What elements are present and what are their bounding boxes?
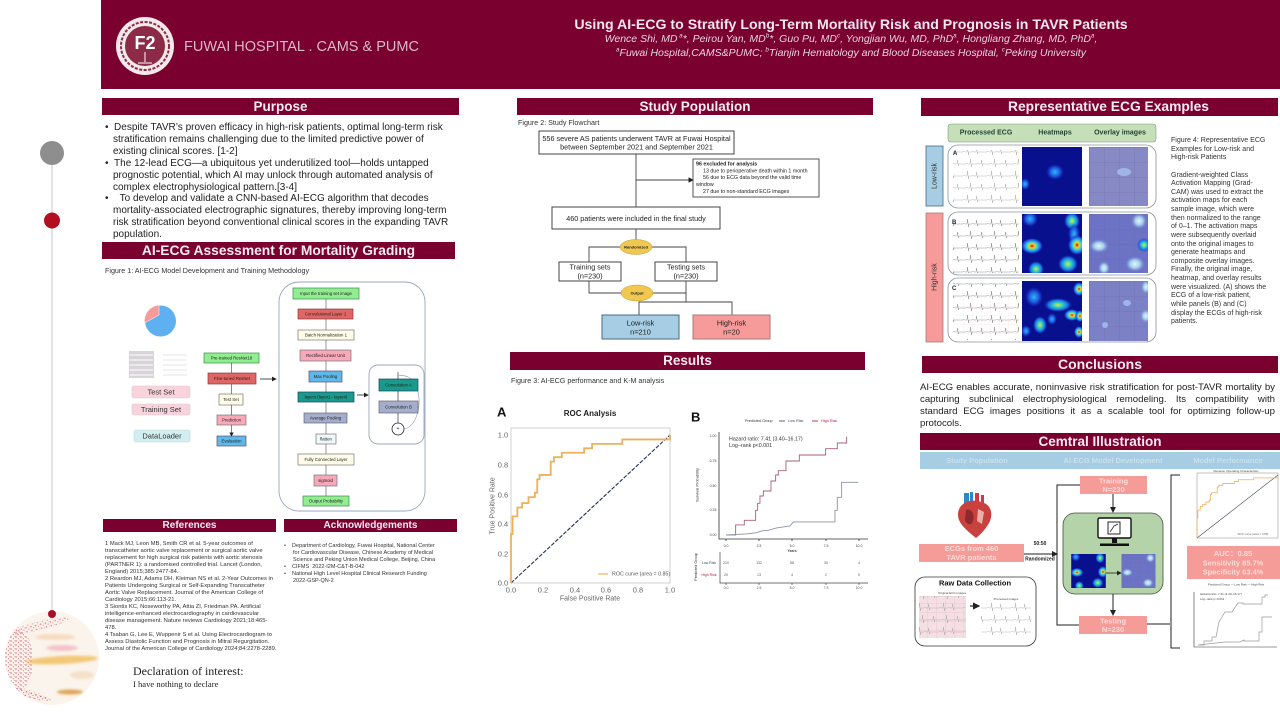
- dataset labels: Training Set: [141, 405, 182, 414]
- figure 4 caption and methods text: then normalized to the range: [1171, 215, 1261, 222]
- figure 4 caption and methods text: Examples for Low-risk and: [1171, 146, 1254, 153]
- heading: Acknowledgements: Acknowledgements: [324, 520, 417, 531]
- figure 3 caption: Figure 3: AI-ECG performance and K-M analysis: [511, 377, 664, 385]
- figure 4 caption and methods text: Finally, the original image,: [1171, 266, 1252, 273]
- low-risk side label: [926, 146, 943, 206]
- column heading strip: [920, 452, 1280, 469]
- testing box: [1079, 616, 1147, 634]
- references list: [105, 540, 276, 652]
- small KM chart: [1194, 582, 1277, 647]
- randomized node: [620, 240, 652, 254]
- ROC axis ticks: 0.6: [601, 586, 611, 594]
- ECG source box: ECGs from 460: [945, 544, 998, 553]
- references list: Cardiology 2015;66:113-21.: [105, 596, 176, 602]
- low-risk box: n=210: [630, 328, 651, 336]
- heading: References: [103, 519, 276, 532]
- KM y axis label: Survival Probability: [694, 468, 700, 502]
- high-risk side label: [926, 213, 943, 342]
- exclusion box: 56 due to ECG data beyond the valid time: [703, 175, 801, 181]
- small KM chart: Hazard ratio: 7.41 (3.40–16.17): [1200, 592, 1242, 596]
- low-risk side label: Low-risk: [932, 162, 938, 189]
- row B overlay: [1089, 214, 1148, 273]
- raw data collection panel: Processed images: [994, 597, 1019, 601]
- enrolled patients box: [539, 131, 734, 154]
- heading: Results: Results: [663, 353, 712, 368]
- KM tick labels: 2.5: [757, 544, 761, 548]
- KM hazard ratio annotation: Log−rank p<0.001: [729, 443, 772, 449]
- figure 4 caption and methods text: patients.: [1171, 318, 1198, 325]
- affiliations: aFuwai Hospital,CAMS&PUMC; bTianjin Hematology and Blood Diseases Hospital, cPeking University: [616, 46, 1086, 59]
- exclusion box: 13 due to perioperative death within 1 month: [703, 168, 808, 174]
- heading: Acknowledgements: [284, 519, 457, 532]
- figure 4 caption and methods text: were subsequently overlaid: [1171, 232, 1256, 239]
- figure 4 caption and methods text: Figure 4: Representative ECG: [1171, 137, 1265, 144]
- row B ECG trace: B: [952, 220, 957, 226]
- high-risk side label: High-risk: [932, 263, 938, 291]
- risk table: 5.0: [790, 586, 794, 590]
- low-risk box: [602, 315, 679, 339]
- row C ECG trace: C: [952, 286, 957, 292]
- randomization ratio labels: Randomized: [1025, 556, 1055, 562]
- figure 4 caption and methods text: Activation Mapping (Grad-: [1171, 180, 1253, 187]
- declaration of interest: [133, 664, 244, 689]
- dataset labels: Test Set: [147, 388, 175, 396]
- ROC title: ROC Analysis: [564, 409, 617, 418]
- testing set box: Testing sets: [667, 262, 705, 272]
- enrolled patients box: between September 2021 and September 2021: [560, 142, 713, 152]
- KM legend: Low Risk: [788, 419, 804, 423]
- randomization ratio labels: [1025, 541, 1055, 562]
- row frames: [948, 145, 1156, 342]
- network architecture panel: flatten: [320, 436, 332, 442]
- risk table: 0.0: [724, 586, 728, 590]
- KM tick labels: 0.25: [710, 508, 716, 512]
- poster title: Using AI-ECG to Stratify Long-Term Mortality Risk and Prognosis in TAVR Patients: [574, 16, 1128, 32]
- high-risk box: n=20: [723, 328, 740, 336]
- conclusions text: protocols.: [920, 418, 962, 429]
- heading: Purpose: [102, 98, 459, 115]
- randomization ratio labels: 50:50: [1034, 541, 1047, 547]
- raw data collection panel: [915, 577, 1036, 646]
- evaluation pipeline: [204, 353, 259, 446]
- column heading strip: AI-ECG Model Development: [1063, 456, 1163, 465]
- figure 4 caption and methods text: sample image, which were: [1171, 206, 1254, 213]
- network architecture panel: Batch Normalization 1: [305, 332, 348, 338]
- references list: England) 2015;385:2477-84.: [105, 568, 178, 574]
- ECG source box: TAVR patients: [946, 553, 997, 562]
- training box: Training: [1099, 476, 1129, 486]
- figure 4 caption and methods text: High-risk Patients: [1171, 154, 1226, 161]
- residual block panel: [369, 365, 424, 444]
- figure 1 caption: Figure 1: AI-ECG Model Development and Training Methodology: [105, 267, 309, 275]
- references list: replacement for high surgical risk patients with aortic stenosis: [105, 554, 263, 560]
- small ROC chart: [1197, 469, 1278, 538]
- risk table: 0: [858, 573, 860, 577]
- KM curves: [726, 437, 858, 535]
- row A overlay: [1089, 147, 1148, 206]
- heading: Representative ECG Examples: Representative ECG Examples: [1008, 99, 1209, 114]
- KM legend: High Risk: [821, 419, 837, 423]
- training set box: (n=230): [578, 272, 602, 280]
- chart B: Kaplan-Meier analysis: [691, 410, 868, 590]
- training box: [1080, 476, 1147, 494]
- evaluation pipeline: Test Set: [223, 397, 240, 402]
- small ROC chart: Receiver Operating Characteristic: [1213, 469, 1259, 473]
- testing set box: (n=230): [674, 272, 698, 280]
- small KM chart: Log−rank p<0.001: [1200, 597, 1225, 601]
- column heading strip: Study Population: [946, 456, 1008, 465]
- ROC axis ticks: 0.8: [633, 586, 643, 594]
- risk table: High Risk: [702, 573, 717, 577]
- diagonal reference: [511, 435, 670, 583]
- purpose text: population.: [113, 229, 162, 240]
- ROC axis ticks: 0.4: [498, 520, 508, 528]
- figure 4 caption and methods text: heatmap, and overlay results: [1171, 275, 1261, 282]
- KM hazard ratio annotation: [729, 436, 803, 449]
- network architecture panel: Convolutional Layer 1: [305, 312, 347, 316]
- KM tick labels: 7.5: [824, 544, 828, 548]
- acknowledgements list: [284, 543, 436, 584]
- decorative timeline with gray and red nodes: [40, 141, 64, 612]
- network architecture panel: Max Pooling: [314, 374, 338, 379]
- KM tick labels: 0.50: [710, 484, 716, 488]
- row A ECG trace: A: [953, 151, 958, 157]
- heading: Study Population: Study Population: [640, 99, 750, 114]
- column header strip: [948, 124, 1156, 142]
- acknowledgements list: • CIFMS 2022-I2M-C&T-B-042: [284, 564, 364, 570]
- output node: [621, 285, 653, 301]
- risk table: 10.0: [856, 586, 862, 590]
- evaluation pipeline: Pre-trained ResNet18: [211, 356, 253, 360]
- heading: Central Illustration: [920, 433, 1280, 450]
- low-risk box: Low-risk: [627, 318, 655, 328]
- icon: AI monitor: [1098, 518, 1131, 546]
- ROC axis ticks: 0.2: [538, 586, 548, 594]
- declaration text: I have nothing to declare: [133, 679, 218, 689]
- purpose text: • To develop and validate a CNN-based AI-ECG algorithm that decodes: [105, 193, 429, 204]
- risk table: 132: [756, 561, 762, 565]
- heading: Study Population: [517, 98, 873, 115]
- ROC legend: ROC curve (area = 0.85): [612, 572, 670, 578]
- ROC axis labels: [490, 477, 620, 602]
- references list: 478.: [105, 624, 116, 630]
- network architecture panel: Input the training set image: [300, 291, 353, 296]
- figure 4 caption and methods text: [1171, 136, 1266, 325]
- evaluation pipeline: Fine-tuned ResNet: [214, 376, 251, 381]
- risk table: Predicted Group: [694, 553, 698, 581]
- exclusion box: window: [696, 182, 714, 188]
- purpose text: prognostic potential, which AI may unlock through automated analysis of: [113, 170, 433, 181]
- risk table: 210: [723, 561, 729, 565]
- ROC axis ticks: 0.4: [570, 586, 580, 594]
- row B heatmap: [1022, 214, 1082, 273]
- ROC axis ticks: 0.6: [498, 490, 508, 500]
- risk table: 58: [790, 561, 794, 565]
- row B ECG trace: [952, 217, 1019, 273]
- heading: AI-ECG Assessment: [102, 242, 455, 259]
- model overlay: [1122, 554, 1156, 588]
- KM legend: Predicted Group: [745, 419, 773, 423]
- model heatmap: [1071, 554, 1106, 588]
- high-risk box: [693, 315, 770, 339]
- references list: Assess Diastolic Function and Prognosis in Mitral Regurgitation.: [105, 638, 269, 644]
- output node: Output: [630, 290, 644, 296]
- risk table: 20: [724, 573, 728, 577]
- ROC axis ticks: 0.2: [498, 550, 508, 558]
- references list: 4 Tsaban G, Lee E, Wuppenir S et al. Using Electrocardiogram to: [105, 632, 272, 638]
- purpose text: [105, 122, 448, 240]
- exclusion box: [693, 159, 819, 197]
- arrow to residual block: [357, 394, 368, 396]
- figure 4 caption and methods text: of 0–1. The activation maps: [1171, 223, 1257, 230]
- central illustration body: [915, 452, 1280, 648]
- header banner: [101, 0, 1280, 89]
- evaluation pipeline: Prediction: [222, 418, 242, 422]
- heading: Results: [510, 352, 865, 370]
- network architecture panel: Average Pooling: [310, 416, 342, 420]
- residual block panel: +: [397, 426, 400, 432]
- ROC axis ticks: 1.0: [665, 586, 675, 594]
- exclusion box: 27 due to non-standard ECG images: [703, 189, 790, 195]
- icon: heart: [958, 492, 991, 538]
- risk table: 7.5: [824, 586, 828, 590]
- metrics box: Specificity 63.4%: [1203, 568, 1264, 576]
- network architecture panel: sigmoid: [318, 478, 334, 483]
- figure 4 caption and methods text: onto the original images to: [1171, 240, 1254, 248]
- decorative watercolor ornament: [3, 610, 99, 705]
- risk table: 4: [858, 561, 860, 565]
- residual block panel: Convolution B: [385, 404, 412, 410]
- ROC curve: [511, 435, 670, 583]
- purpose text: • Despite TAVR’s proven efficacy in high-risk patients, optimal long-term risk: [105, 122, 443, 133]
- risk table: 30: [824, 561, 828, 565]
- arrows through model panel: [1112, 494, 1114, 512]
- column heading strip: Model Performance: [1193, 456, 1263, 465]
- KM hazard ratio annotation: Hazard ratio: 7.41 (3.40–16.17): [729, 436, 803, 442]
- figure 2: study flowchart: [539, 131, 819, 339]
- figure 4 caption and methods text: display the ECGs of high-risk: [1171, 310, 1262, 316]
- acknowledgements list: for Cardiovascular Disease, Chinese Academy of Medical: [293, 550, 433, 556]
- authors: Wence Shi, MD a*, Peirou Yan, MDb*, Guo Pu, MDc, Yongjian Wu, MD, PhDa, Hongliang Zhang, MD, PhDa,: [605, 32, 1097, 45]
- references list: Aortic Valve Replacement. Journal of the American College of: [105, 590, 263, 596]
- row C heatmap: [1022, 281, 1082, 341]
- heading: Conclusions: Conclusions: [1058, 356, 1142, 372]
- KM axes: [719, 432, 868, 541]
- references list: disease management. Nature reviews Cardiology 2021;18:465-: [105, 618, 267, 624]
- network architecture panel: [279, 282, 425, 511]
- figure 2 caption: Figure 2: Study Flowchart: [518, 119, 599, 127]
- dataset labels: DataLoader: [142, 432, 182, 440]
- purpose text: mortality-associated electrographic signatures, thereby improving long-term: [113, 205, 446, 216]
- ROC axis ticks: 0.8: [498, 460, 508, 470]
- training box: N=230: [1102, 485, 1125, 494]
- raw data collection panel: Raw Data Collection: [939, 578, 1011, 588]
- network architecture panel: Fully Connected Layer: [304, 457, 348, 462]
- KM tick labels: 0.75: [710, 459, 716, 463]
- ROC axis ticks: [498, 430, 675, 594]
- header title and authors: [574, 16, 1128, 59]
- enrolled patients box: 556 severe AS patients underwent TAVR at Fuwai Hospital: [542, 134, 731, 143]
- figure 4 caption and methods text: activation maps for each: [1171, 197, 1247, 204]
- purpose text: risk stratification beyond conventional clinical scores in the expanding TAVR: [113, 217, 448, 228]
- column header strip: Heatmaps: [1038, 130, 1072, 136]
- small KM chart: Predicted Group — Low Risk — High Risk: [1208, 582, 1265, 586]
- purpose text: complex electrophysiological pattern.[3-4]: [113, 182, 297, 193]
- acknowledgements list: • National High Level Hospital Clinical Research Funding: [284, 571, 427, 577]
- risk table: 2: [825, 573, 827, 577]
- purpose text: • The 12-lead ECG—a ubiquitous yet underutilized tool—holds untapped: [105, 158, 429, 169]
- figure 1: model development: [129, 282, 425, 511]
- included patients box: [552, 207, 720, 229]
- heading: Purpose: Purpose: [253, 99, 308, 114]
- data table thumbnails: [129, 351, 187, 378]
- ROC axis ticks: 1.0: [498, 430, 508, 440]
- network architecture panel: Output Probability: [309, 498, 344, 504]
- small ROC chart: ROC curve (area = 0.85): [1238, 532, 1268, 536]
- column header strip: Overlay images: [1094, 130, 1146, 136]
- KM legend: [745, 419, 837, 423]
- panel letter B: B: [691, 410, 700, 424]
- figure 4 caption and methods text: composite overlay images.: [1171, 258, 1254, 265]
- metrics box: [1187, 546, 1280, 579]
- figure 4: ECG examples grid: [926, 124, 1156, 342]
- arrow to testing: [1112, 594, 1114, 615]
- exclusion box: 96 excluded for analysis: [696, 162, 757, 168]
- metrics box: Sensitivity 85.7%: [1203, 558, 1264, 568]
- heatmap to overlay arrow: [1106, 572, 1121, 574]
- figure 4 caption and methods text: Gradient-weighted Class: [1171, 172, 1248, 178]
- KM tick labels: 5.0: [790, 544, 794, 548]
- risk table: Low Risk: [702, 561, 716, 565]
- acknowledgements list: 2022-GSP-QN-2: [293, 578, 334, 584]
- purpose text: stratification remains challenging due to the limited predictive power of: [113, 134, 424, 145]
- randomization connector: [1024, 485, 1080, 625]
- hospital logo: [116, 17, 174, 75]
- training set box: Training sets: [570, 262, 611, 272]
- conclusions text: AI-ECG enables accurate, noninvasive risk stratification for post-TAVR mortality by: [920, 382, 1275, 393]
- ROC axis ticks: 0.0: [506, 586, 516, 594]
- AI model panel: [1063, 513, 1163, 594]
- arrow to network: [260, 378, 276, 380]
- KM tick labels: 1.00: [710, 434, 716, 438]
- risk table: 4: [791, 573, 793, 577]
- testing box: N=230: [1102, 625, 1124, 634]
- column header strip: Processed ECG: [960, 130, 1013, 136]
- conclusions text: capturing subclinical electrophysiological remodeling. Its compatibility with: [920, 394, 1275, 405]
- references list: transcatheter aortic valve replacement or surgical aortic valve: [105, 548, 263, 554]
- hospital logo: F2: [134, 33, 156, 53]
- network architecture panel: layers (layer1 - layer4): [305, 394, 348, 400]
- header hospital name: FUWAI HOSPITAL . CAMS & PUMC: [184, 39, 419, 55]
- row C overlay: [1089, 281, 1148, 341]
- residual block panel: Convolution A: [385, 382, 412, 388]
- heading: Representative ECG Examples: [921, 98, 1278, 116]
- ECG source box: [919, 544, 1024, 562]
- metrics box: AUC：0.85: [1214, 549, 1252, 558]
- conclusions text: standard ECG images positions it as a scalable tool for optimizing follow-up: [920, 406, 1275, 417]
- heading: References: References: [163, 520, 216, 531]
- ROC axis labels: False Positive Rate: [560, 596, 620, 602]
- pie chart: data split: [144, 305, 176, 336]
- figure 4 caption and methods text: ECG of a low-risk patient,: [1171, 292, 1251, 299]
- ROC axis ticks: 0.0: [498, 578, 508, 588]
- KM tick labels: 0.00: [710, 533, 716, 537]
- heading: Conclusions: [922, 356, 1278, 373]
- figure 4 caption and methods text: while panels (B) and (C): [1171, 301, 1247, 308]
- ROC plot frame: [511, 428, 670, 583]
- KM tick labels: 10.0: [856, 544, 862, 548]
- heading: Central Illustration: Cemtral Illustration: [1038, 434, 1162, 449]
- acknowledgements list: Science and Peking Union Medical College, Beijing, China: [293, 557, 435, 563]
- purpose text: existing clinical scores. [1-2]: [113, 146, 238, 157]
- conclusions text: [920, 382, 1275, 429]
- figure 4 caption and methods text: were visualized. (A) shows the: [1171, 284, 1266, 291]
- references list: intelligence-enhanced electrocardiography in cardiovascular: [105, 610, 259, 616]
- flowchart connectors: [589, 154, 732, 315]
- figure 4 caption and methods text: generate heatmaps and: [1171, 249, 1245, 256]
- references list: 1 Mack MJ, Leon MB, Smith CR et al. 5-year outcomes of: [105, 540, 253, 546]
- references list: 2 Reardon MJ, Adams DH, Kleiman NS et al. 2-Year Outcomes in: [105, 576, 273, 582]
- raw data collection panel: Original ECG images: [938, 591, 967, 595]
- row C ECG trace: [952, 283, 1019, 340]
- row A heatmap: [1022, 147, 1082, 206]
- training set box: [559, 262, 621, 281]
- randomized node: Randomized: [624, 244, 648, 250]
- figure 4 caption and methods text: CAM) was used to extract the: [1171, 189, 1263, 196]
- row A ECG trace: [953, 150, 1019, 204]
- risk table: 2.5: [757, 586, 761, 590]
- references list: Patients Undergoing Surgical or Self-Expanding Transcatheter: [105, 582, 265, 588]
- testing set box: [655, 262, 717, 281]
- KM tick labels: Years: [787, 549, 797, 553]
- included patients box: 460 patients were included in the final study: [566, 214, 706, 223]
- risk table: [694, 552, 868, 590]
- references list: (PARTNER 1): a randomised controlled trial. Lancet (London,: [105, 562, 262, 568]
- panel letter A: A: [497, 404, 507, 420]
- evaluation pipeline: Evaluation: [221, 438, 242, 444]
- KM tick labels: 0.0: [724, 544, 728, 548]
- references list: 3 Siontis KC, Noseworthy PA, Attia ZI, Friedman PA. Artificial: [105, 604, 261, 610]
- chart A: ROC analysis: [490, 404, 675, 602]
- KM tick labels: [710, 434, 862, 553]
- acknowledgements list: • Department of Cardiology, Fuwai Hospital, National Center: [284, 543, 435, 549]
- references list: Journal of the American College of Cardiology 2024;84:2278-2289.: [105, 646, 276, 652]
- high-risk box: High-risk: [717, 318, 746, 328]
- dataset labels: [132, 386, 190, 442]
- testing box: Testing: [1100, 616, 1126, 626]
- declaration heading: Declaration of interest:: [133, 664, 244, 678]
- ROC axis labels: True Positive Rate: [490, 477, 496, 535]
- performance bracket: [1147, 475, 1180, 648]
- heading: AI-ECG Assessment: AI-ECG Assessment for Mortality Grading: [142, 243, 415, 258]
- network architecture panel: Rectified Linear Unit: [306, 353, 346, 358]
- risk table: 13: [757, 573, 761, 577]
